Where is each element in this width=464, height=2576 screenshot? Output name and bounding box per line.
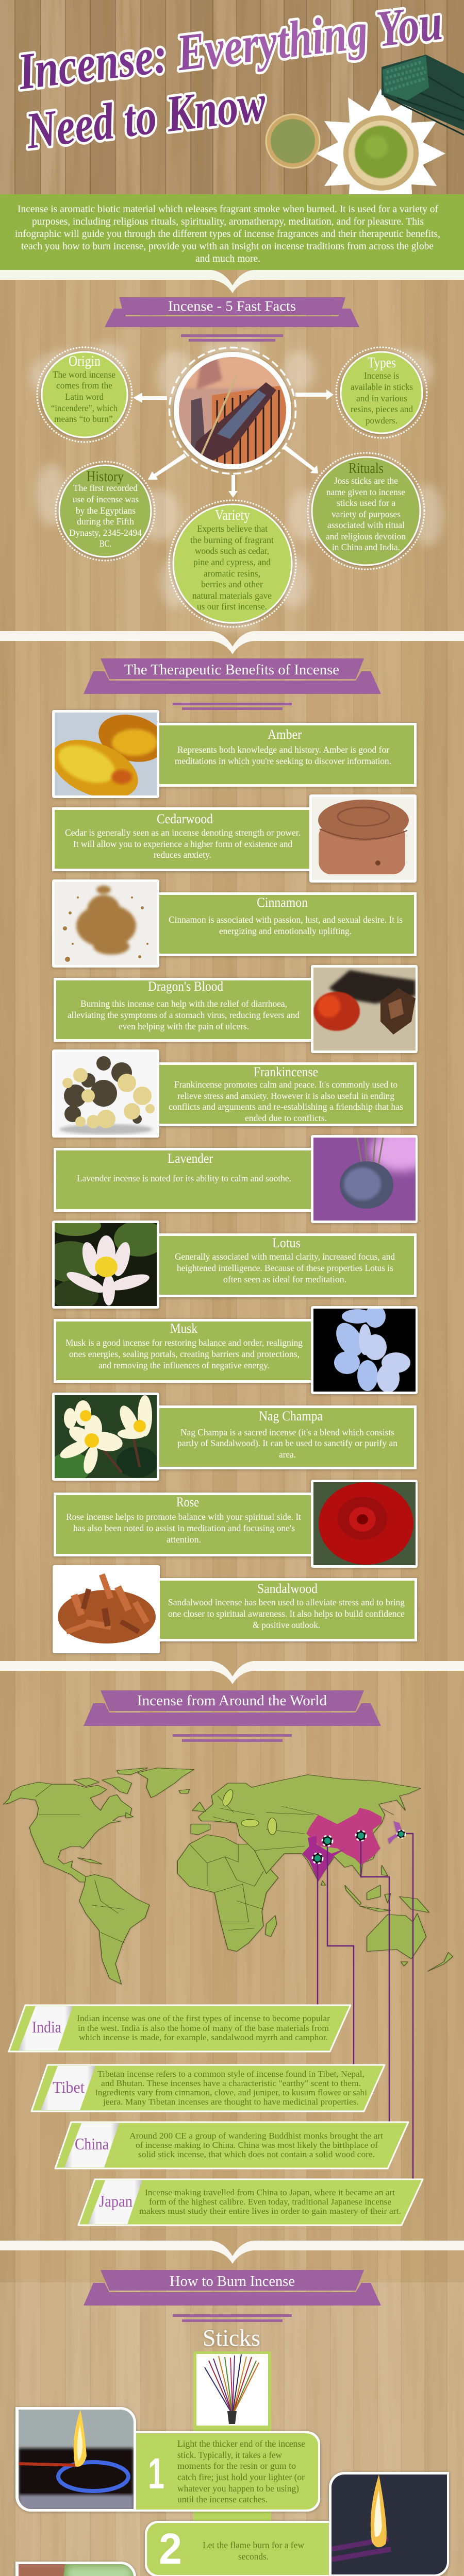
- text: rituals: sticks used for a: [337, 498, 395, 508]
- arrow: to types: [295, 389, 334, 400]
- text: variety: [190, 523, 274, 612]
- heading: cedarwood: Cedarwood: [157, 811, 213, 826]
- text: cedarwood: reduces anxiety.: [154, 850, 211, 860]
- icon: white starburst: [317, 89, 445, 194]
- intro text: and much more.: [195, 253, 260, 264]
- text: musk: [65, 1337, 303, 1370]
- text: types: resins, pieces and: [351, 404, 413, 414]
- number 1: 1: [148, 2449, 164, 2498]
- section banner: 5 fast facts: [105, 297, 359, 342]
- photo: sandalwood: [53, 1565, 160, 1653]
- text: history: by the Egyptians: [76, 505, 136, 516]
- title: Need to Know: [23, 74, 269, 160]
- text: rose: [66, 1512, 301, 1545]
- number 2: 2: [159, 2524, 182, 2573]
- section banner: therapeutic benefits: [84, 658, 381, 710]
- heading: origin: Origin: [69, 353, 101, 369]
- text: india: in the west. India is also the home of many of the base materials from: [78, 2023, 329, 2033]
- heading: sandalwood: Sandalwood: [257, 1581, 318, 1596]
- heading: sticks: Sticks: [203, 2325, 260, 2351]
- panel: cinnamon: [52, 879, 417, 968]
- text: frankincense: [169, 1079, 403, 1123]
- card: tibet: [31, 2065, 385, 2111]
- world map: [4, 1768, 453, 1984]
- heading: rituals: Rituals: [349, 461, 384, 477]
- text: frankincense: Frankincense promotes calm and peace. It's commonly used to: [174, 1079, 397, 1090]
- central incense photo: [169, 347, 296, 474]
- heading: cinnamon: Cinnamon: [257, 895, 308, 910]
- text: india: [77, 2013, 330, 2042]
- card: japan: [78, 2179, 423, 2225]
- heading: lotus: Lotus: [272, 1235, 301, 1250]
- text: nag champa: [177, 1427, 397, 1460]
- text: rituals: in China and India.: [332, 542, 400, 552]
- text: amber: meditations in which you're seeking to discover information.: [175, 756, 391, 766]
- text: india: Indian incense was one of the first types of incense to become popular: [77, 2013, 330, 2023]
- panel: dragon's blood: [54, 965, 418, 1053]
- photo: dragon's blood: [311, 965, 418, 1053]
- arrow: to origin: [133, 393, 167, 403]
- card: india: [9, 2005, 351, 2052]
- text: step 1: until the incense catches.: [177, 2494, 268, 2504]
- map pins: [312, 1830, 405, 1863]
- panel: sandalwood: [53, 1565, 417, 1653]
- photo: frankincense: [52, 1049, 159, 1138]
- heading: dragon's blood: Dragon's Blood: [148, 979, 223, 994]
- photo: stove flame: [15, 2407, 136, 2512]
- text: origin: “incendere”, which: [51, 403, 118, 413]
- text: rituals: Joss sticks are the: [334, 476, 398, 486]
- text: nag champa: Nag Champa is a sacred incense (it's a blend which consists: [180, 1427, 394, 1438]
- section banner: how to burn: [84, 2270, 381, 2322]
- text: cedarwood: [65, 827, 301, 860]
- text: tibet: [95, 2069, 367, 2107]
- heading: variety: Variety: [215, 507, 250, 523]
- text: cedarwood: It will allow you to experience a higher form of existence and: [73, 839, 292, 849]
- text: japan: [139, 2188, 401, 2216]
- label: india: India: [32, 2018, 61, 2036]
- text: lotus: often seen as ideal for meditation.: [223, 1274, 346, 1284]
- text: history: during the Fifth: [77, 516, 134, 527]
- text: dragon's blood: [68, 998, 300, 1031]
- title: [15, 0, 445, 160]
- text: step 1: catch fire; just hold your lighter (or: [177, 2472, 305, 2483]
- text: japan: makers must study their entire lives in order to gain mastery of their art.: [139, 2206, 401, 2216]
- text: cinnamon: [169, 914, 403, 936]
- text: variety: aromatic resins,: [204, 568, 260, 579]
- photo: nag champa: [49, 1393, 159, 1483]
- text: tibet: jeera. Many Tibetan incenses are thought to have medicinal properties.: [103, 2097, 359, 2107]
- text: tibet: Tibetan incense refers to a common style of incense found in Tibet, Nepal,: [97, 2069, 364, 2079]
- panel: lavender: [54, 1130, 432, 1223]
- photo: cedarwood: [309, 794, 417, 883]
- text: amber: Represents both knowledge and history. Amber is good for: [177, 744, 389, 755]
- panel: rose: [54, 1480, 418, 1568]
- text: lavender: Lavender incense is noted for its ability to calm and soothe.: [77, 1173, 291, 1183]
- text: history: The first recorded: [73, 483, 138, 493]
- photo: blowing out flame: [15, 2562, 136, 2576]
- text: sandalwood: Sandalwood incense has been used to alleviate stress and to bring: [168, 1597, 405, 1607]
- divider 2: [0, 631, 464, 654]
- text: types: and in various: [356, 393, 407, 403]
- text: dragon's blood: alleviating the symptoms of a stomach virus, reducing fevers and: [68, 1010, 300, 1020]
- text: variety: pine and cypress, and: [193, 557, 271, 567]
- text: cinnamon: Cinnamon is associated with passion, lust, and sexual desire. It is: [169, 914, 403, 925]
- text: rituals: name given to incense: [326, 487, 405, 497]
- step 1: [15, 2407, 320, 2512]
- text: amber: [175, 744, 391, 766]
- text: india: which incense is made, for example, sandalwood myrrh and camphor.: [79, 2032, 328, 2042]
- fact: variety: [169, 500, 296, 627]
- text: variety: natural materials gave: [192, 590, 272, 601]
- text: lotus: [175, 1251, 395, 1284]
- panel: musk: [54, 1305, 418, 1394]
- connector lines: [318, 1834, 413, 2179]
- text: variety: woods such as cedar,: [195, 546, 269, 556]
- arrow: to rituals: [283, 446, 318, 473]
- section banner: how to burn: How to Burn Incense: [170, 2273, 295, 2290]
- text: frankincense: ended due to conflicts.: [245, 1113, 327, 1123]
- panel: lotus: [42, 1215, 417, 1311]
- section banner: around the world: [84, 1690, 381, 1742]
- panel: cedarwood: [52, 794, 417, 883]
- icon: small bowl of powder: [266, 114, 320, 168]
- icon: incense stick bundle: [382, 55, 464, 135]
- text: tibet: Ingredients vary from cinnamon, clove, and juniper, to kusum flower or sahi: [95, 2088, 367, 2097]
- photo: cinnamon: [52, 879, 159, 968]
- heading: musk: Musk: [170, 1321, 197, 1336]
- step 2: [145, 2472, 449, 2576]
- text: step 1: moments for the resin or gum to: [177, 2461, 296, 2471]
- text: origin: means “to burn”.: [54, 414, 115, 424]
- text: history: Dynasty, 2345-2494: [69, 528, 142, 538]
- text: types: [351, 370, 413, 426]
- text: china: Around 200 CE a group of wandering Buddhist monks brought the art: [129, 2131, 383, 2141]
- text: lotus: heightened intelligence. Because of these properties Lotus is: [177, 1263, 393, 1273]
- text: dragon's blood: even helping with the pain of ulcers.: [119, 1021, 249, 1031]
- text: frankincense: conflicts and arguments and re-establishing a friendship that has: [169, 1101, 403, 1112]
- photo: amber: [43, 707, 171, 810]
- icon: large bowl of powder: [343, 115, 419, 191]
- text: variety: the burning of fragrant: [190, 535, 274, 545]
- china highlight: [306, 1808, 382, 1865]
- heading: nag champa: Nag Champa: [259, 1409, 323, 1423]
- photo: burning sticks: [329, 2472, 449, 2576]
- text: rose: attention.: [167, 1534, 201, 1545]
- text: history: use of incense was: [73, 494, 139, 504]
- text: sandalwood: & positive outlook.: [253, 1620, 320, 1630]
- card: china: [55, 2122, 408, 2168]
- divider 4: [0, 2241, 464, 2264]
- heading: amber: Amber: [268, 727, 302, 742]
- photo: incense stick fan: [196, 2354, 268, 2426]
- label: tibet: Tibet: [53, 2078, 85, 2096]
- panel: frankincense: [52, 1049, 417, 1138]
- panel: nag champa: [49, 1393, 417, 1483]
- text: rituals: associated with ritual: [327, 520, 405, 530]
- text: step 1: Light the thicker end of the incense: [177, 2438, 305, 2449]
- label: china: China: [75, 2134, 109, 2153]
- green strip: sticks: [193, 2351, 271, 2576]
- text: china: of incense making to China. China was most likely the birthplace of: [136, 2140, 378, 2150]
- text: step 1: stick. Typically, it takes a few: [177, 2450, 282, 2460]
- smoke backdrop: fast facts: [31, 337, 443, 631]
- text: rituals: variety of purposes: [332, 509, 401, 519]
- japan highlight: [388, 1821, 403, 1844]
- text: cinnamon: energizing and emotionally uplifting.: [219, 926, 352, 936]
- text: history: [69, 483, 142, 549]
- text: step 2: seconds.: [238, 2551, 269, 2562]
- text: rose: has also been noted to assist in meditation and focusing one's: [73, 1523, 295, 1533]
- text: frankincense: relieve stress and anxiety. However it is also useful in ending: [177, 1091, 394, 1101]
- fact: history: [56, 462, 155, 561]
- photo: lavender: [311, 1130, 432, 1223]
- text: types: Incense is: [364, 370, 399, 381]
- text: nag champa: area.: [279, 1449, 296, 1460]
- text: step 1: whatever you happen to be using): [177, 2483, 299, 2494]
- fact: origin: [37, 347, 132, 442]
- text: musk: Musk is a good incense for restoring balance and order, realigning: [65, 1337, 303, 1348]
- label: japan: Japan: [99, 2192, 132, 2210]
- text: types: powders.: [366, 415, 397, 426]
- text: rituals: and religious devotion: [326, 531, 406, 541]
- text: step 1: [177, 2438, 305, 2504]
- intro text: purposes, including religious rituals, spirituality, aromatherapy, meditation, and for pleasure. This: [32, 216, 424, 227]
- intro text: [15, 204, 440, 264]
- text: step 2: Let the flame burn for a few: [203, 2540, 304, 2550]
- intro text: teach you how to burn incense, provide you with an insight on incense traditions from across the globe: [21, 241, 434, 252]
- fact: rituals: [308, 453, 424, 569]
- heading: lavender: Lavender: [168, 1151, 213, 1166]
- step 3: [14, 2561, 138, 2576]
- text: dragon's blood: Burning this incense can help with the relief of diarrhoea,: [80, 998, 287, 1009]
- intro text: infographic will guide you through the different types of incense fragrances and their therapeutic benefits,: [15, 228, 440, 240]
- text: nag champa: partly of Sandalwood). It can be used to sanctify or purify an: [177, 1438, 397, 1449]
- text: variety: Experts believe that: [197, 523, 268, 534]
- heading: history: History: [87, 469, 124, 485]
- text: sandalwood: one closer to spiritual awareness. It also helps to build confidence: [168, 1608, 405, 1619]
- heading: types: Types: [368, 355, 396, 371]
- section banner: therapeutic benefits: The Therapeutic Benefits of Incense: [124, 662, 339, 678]
- text: tibet: and Bhutan. These incenses have a characteristic "earthy" scent to them.: [101, 2078, 361, 2088]
- photo: lotus: [42, 1215, 165, 1311]
- text: japan: form of the highest calibre. Even today, traditional Japanese incense: [149, 2197, 391, 2207]
- text: musk: ones energies, sealing portals, creating barriers and protections,: [69, 1349, 300, 1359]
- fact: types: [336, 347, 427, 438]
- text: china: [129, 2131, 383, 2159]
- text: types: available in sticks: [351, 382, 413, 392]
- heading: frankincense: Frankincense: [254, 1064, 318, 1079]
- panel: amber: [43, 707, 417, 810]
- text: china: solid stick incense, that which does not contain a solid wood core.: [138, 2149, 375, 2159]
- photo: rose: [311, 1480, 418, 1568]
- divider 1: [0, 270, 464, 293]
- text: variety: us our first incense.: [197, 601, 267, 612]
- arrow: to history: [148, 453, 187, 480]
- text: rose: Rose incense helps to promote balance with your spiritual side. It: [66, 1512, 301, 1522]
- arrow: to variety: [228, 475, 238, 498]
- text: origin: The word incense: [53, 369, 115, 380]
- text: lotus: Generally associated with mental clarity, increased focus, and: [175, 1251, 395, 1262]
- heading: rose: Rose: [176, 1495, 199, 1510]
- text: rituals: [326, 476, 406, 552]
- text: step 2: [203, 2540, 304, 2562]
- divider 3: [0, 1661, 464, 1684]
- india highlight: [303, 1836, 346, 1882]
- section banner: 5 fast facts: Incense - 5 Fast Facts: [168, 298, 296, 314]
- text: origin: [51, 369, 118, 424]
- text: musk: and removing the influences of negative energy.: [98, 1360, 270, 1370]
- header wood panel: [10, 0, 464, 194]
- text: sandalwood: [168, 1597, 405, 1630]
- text: variety: berries and other: [201, 579, 263, 589]
- intro text: Incense is aromatic biotic material which releases fragrant smoke when burned. It is used for a variety of: [18, 204, 438, 215]
- section banner: around the world: Incense from Around the World: [137, 1692, 327, 1709]
- text: origin: comes from the: [56, 380, 112, 391]
- text: origin: Latin word: [65, 392, 104, 402]
- text: cedarwood: Cedar is generally seen as an incense denoting strength or power.: [65, 827, 301, 838]
- text: japan: Incense making travelled from China to Japan, where it became an art: [145, 2188, 395, 2197]
- intro panel: [0, 194, 464, 270]
- photo: musk: [311, 1305, 418, 1394]
- text: history: BC.: [100, 538, 111, 549]
